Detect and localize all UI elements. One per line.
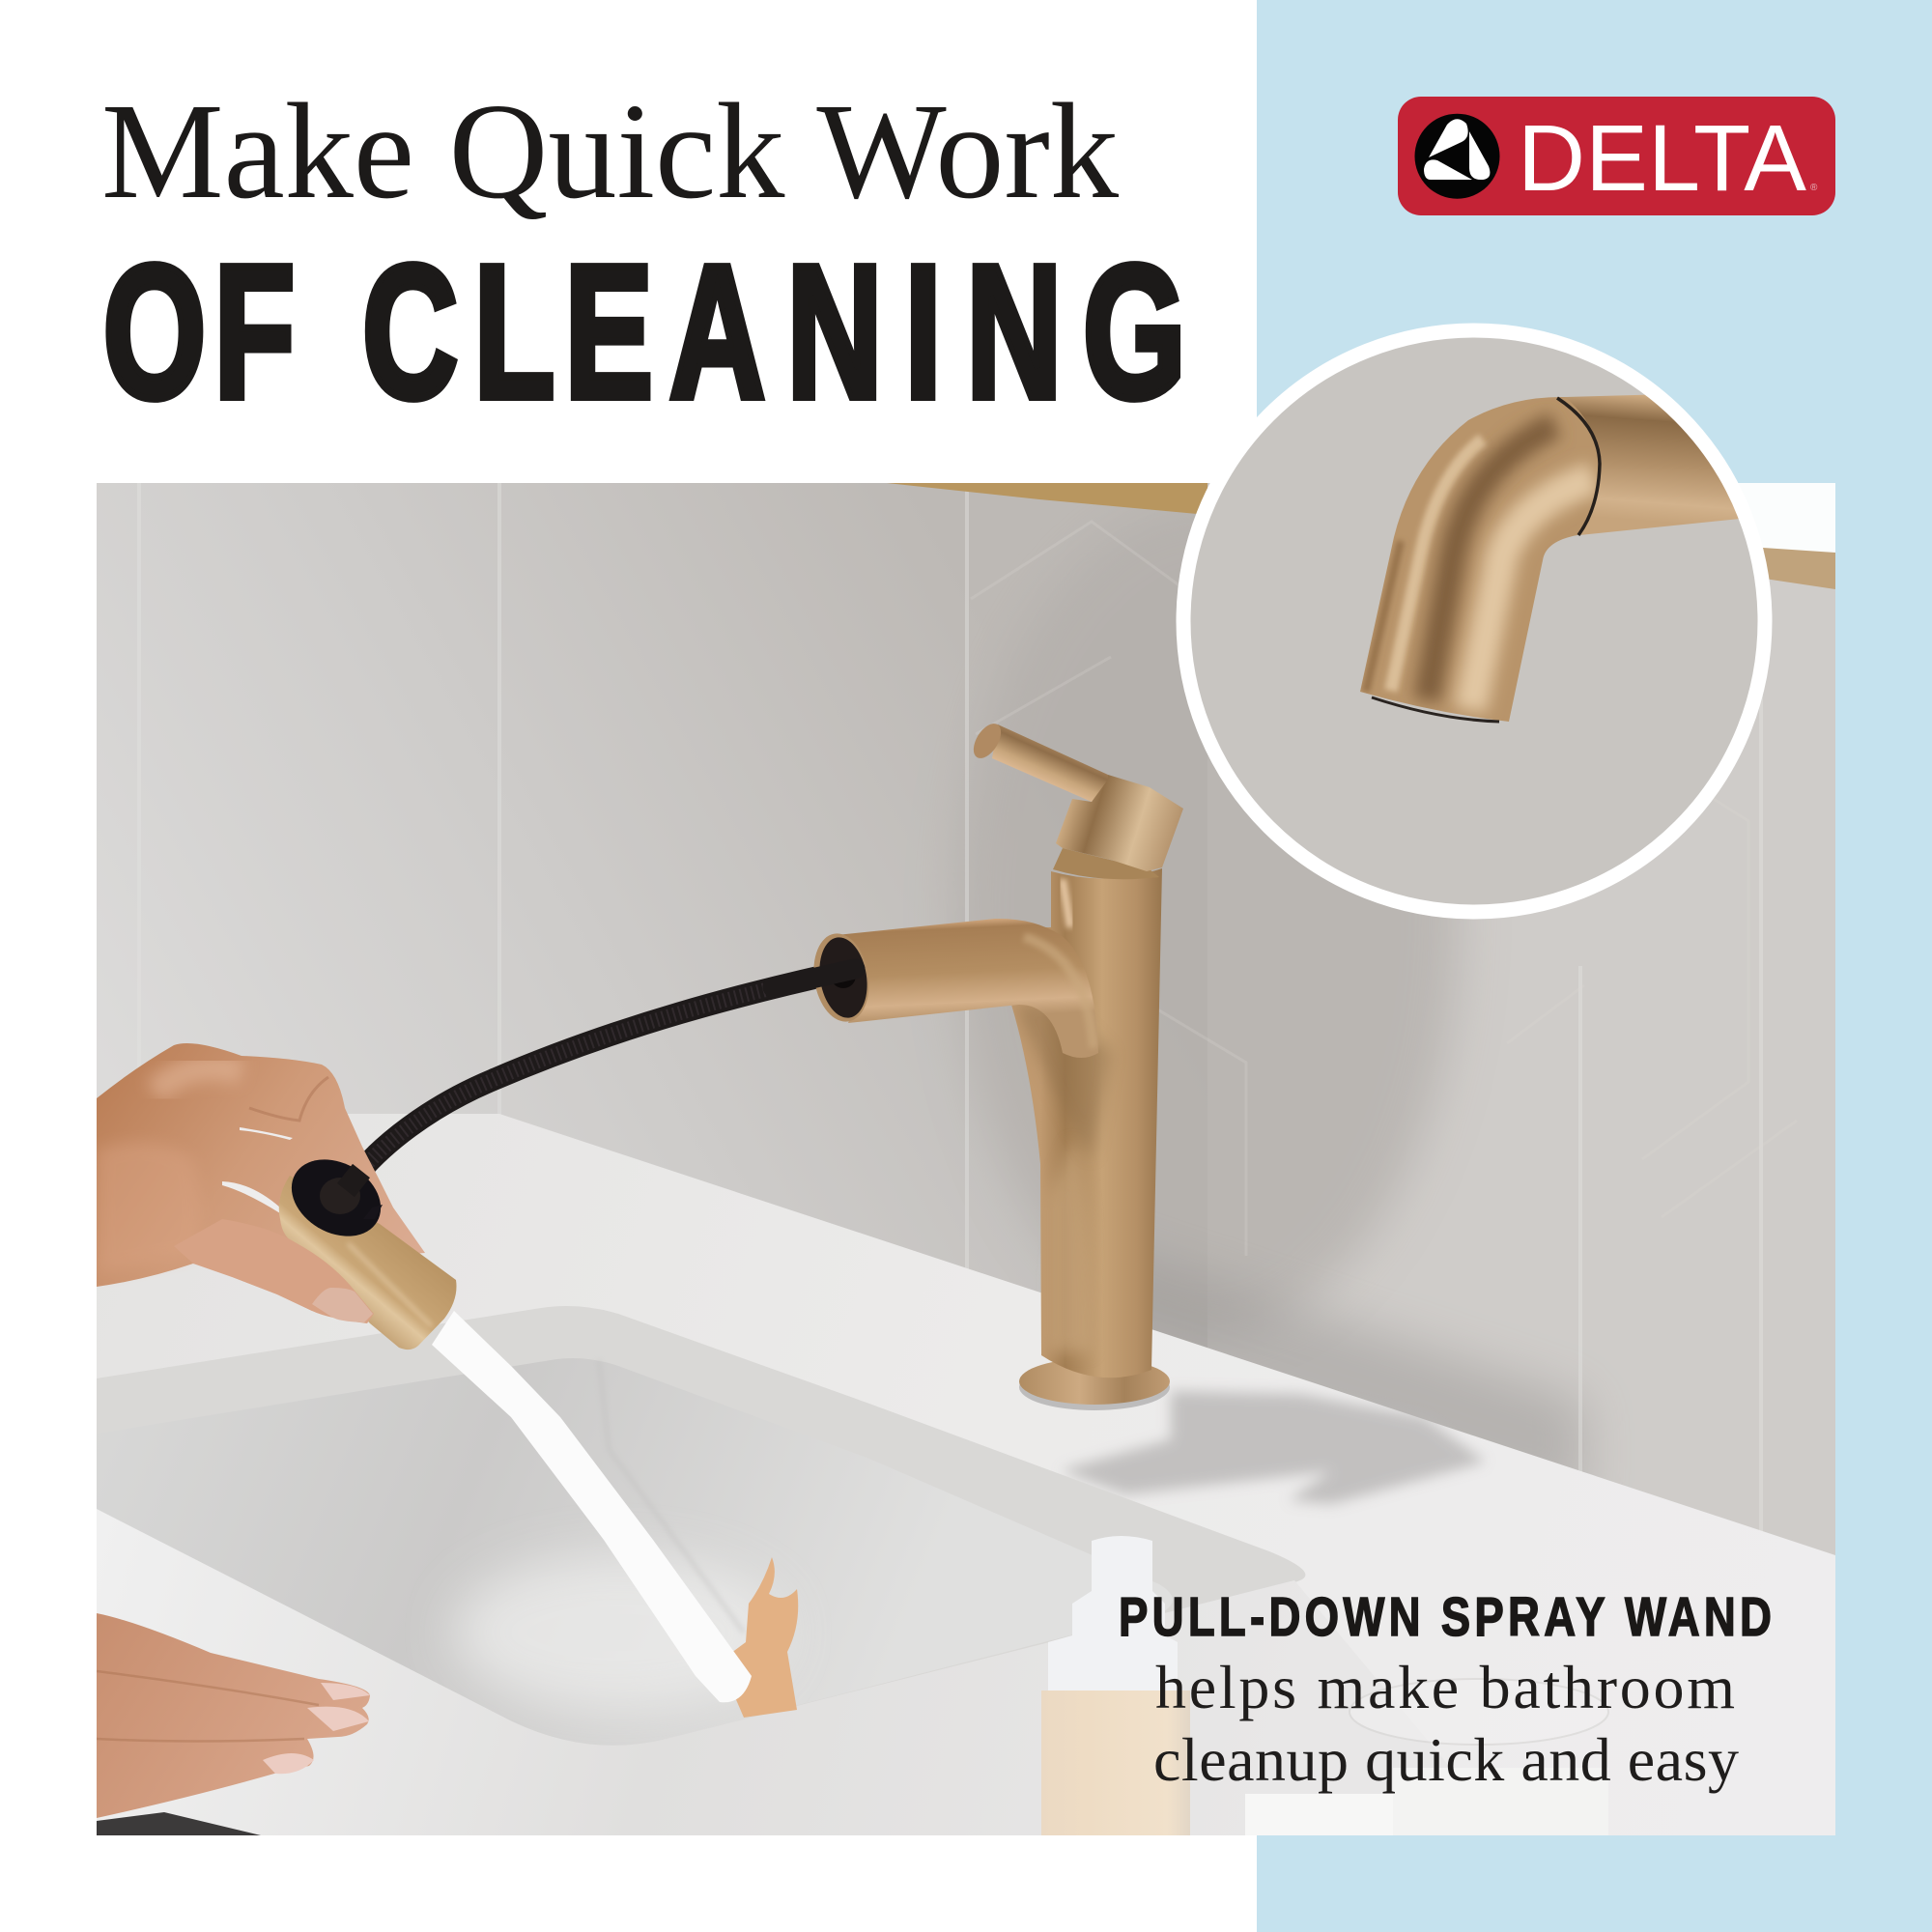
hose xyxy=(364,966,816,1172)
faucet lever xyxy=(968,719,1108,802)
faucet shadow on counter xyxy=(1061,1391,1486,1504)
title: OF CLEANING: OF CLEANING xyxy=(103,226,1186,438)
faucet xyxy=(773,719,1183,1410)
logo: Delta badge xyxy=(1398,97,1835,215)
caption line two: cleanup quick and easy xyxy=(1153,1725,1739,1794)
caption: spray wand xyxy=(1119,1585,1772,1794)
photo: bathroom sink scene xyxy=(97,483,1835,1835)
sink front edge xyxy=(97,1509,1295,1835)
bottle xyxy=(1041,1536,1190,1835)
logo: Delta badge: DELTA xyxy=(1518,105,1806,211)
caption line one: helps make bathroom xyxy=(1155,1653,1735,1721)
upper hand xyxy=(97,1043,425,1311)
faucet spout xyxy=(773,919,1098,1058)
counter top xyxy=(97,1114,1835,1835)
wall tiles xyxy=(97,483,1835,1594)
spray wand xyxy=(278,1144,456,1350)
blue side panel xyxy=(1257,0,1932,1932)
makeup smear xyxy=(734,1557,798,1718)
sink rim xyxy=(97,1306,1306,1730)
lower hand xyxy=(97,1613,370,1818)
faucet handle cap xyxy=(1056,775,1183,871)
faucet body xyxy=(1011,868,1162,1378)
mirror and frame right xyxy=(1739,483,1835,589)
faucet neck xyxy=(1053,848,1159,879)
glass xyxy=(1350,1679,1608,1835)
title: Make Quick Work: Make Quick Work xyxy=(101,74,1119,227)
inset tube xyxy=(1360,391,1777,722)
sink basin xyxy=(242,1358,1173,1719)
logo: Delta badge: ® xyxy=(1810,183,1818,193)
mirror frame left xyxy=(887,483,1208,515)
zoom circle inset xyxy=(1177,324,1777,919)
thumb and nail xyxy=(174,1219,374,1323)
caption heading: PULL-DOWN SPRAY WAND xyxy=(1119,1585,1772,1647)
dark floor corner xyxy=(97,1812,261,1835)
hand fingernails xyxy=(263,1683,370,1774)
water stream xyxy=(432,1311,752,1702)
small cup xyxy=(1245,1794,1393,1835)
faucet base xyxy=(1019,1358,1170,1410)
